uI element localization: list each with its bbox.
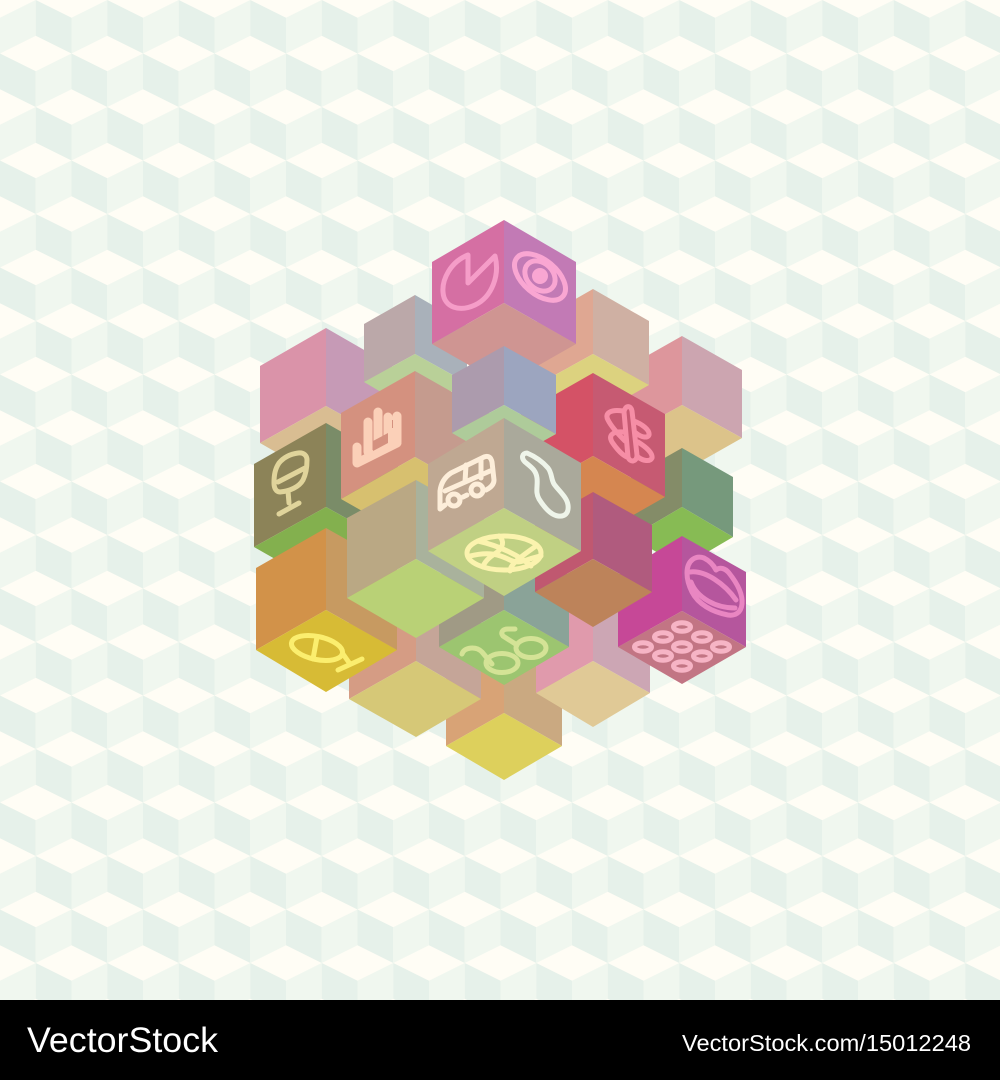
cube: back right tan: [537, 289, 649, 417]
icon: note outline: [523, 453, 568, 516]
cube: right green: [631, 448, 733, 567]
cube: green with script glyph: [439, 538, 569, 685]
icon: keypad dots: [634, 623, 730, 670]
cube: centre left beige with green base: [347, 480, 484, 638]
icon: pie chart: [443, 255, 496, 308]
cube cluster: [254, 220, 746, 780]
icon: wine glass: [274, 453, 307, 514]
cube: bottom yellow: [446, 645, 562, 780]
icon: script glyph: [462, 629, 546, 672]
cube: top pink with pie and eye: [432, 220, 576, 385]
icon: basketball: [467, 536, 541, 571]
cube: lower left sand: [349, 585, 481, 737]
cube: salmon with hand: [341, 371, 489, 541]
cube: left pink: [260, 328, 392, 481]
icon: hand: [357, 412, 397, 463]
cube: back left grey: [364, 295, 467, 412]
cube: red with dollar-like glyph: [521, 373, 665, 538]
cube: orange with phi glyph: [256, 528, 397, 692]
icon: bus: [440, 456, 494, 509]
cube: centre back mauve: [452, 346, 556, 463]
cube: olive with glass: [254, 423, 398, 588]
cube: centre with bus, note and basketball: [428, 418, 581, 596]
icon: eye: [506, 245, 574, 309]
cube: magenta with lips and dots: [618, 536, 746, 684]
cube: back right pink: [622, 336, 742, 472]
footer image id text: VectorStock.com/15012248: [682, 1030, 971, 1056]
icon: phi glyph: [289, 631, 362, 670]
icon: dollar-like glyph: [607, 407, 652, 461]
footer logo text: VectorStock: [27, 1021, 219, 1060]
cube: rose with brown base: [535, 492, 652, 627]
footer bar: [0, 1000, 1000, 1080]
cube: lower right pink: [536, 593, 650, 727]
icon: lips: [687, 557, 742, 615]
